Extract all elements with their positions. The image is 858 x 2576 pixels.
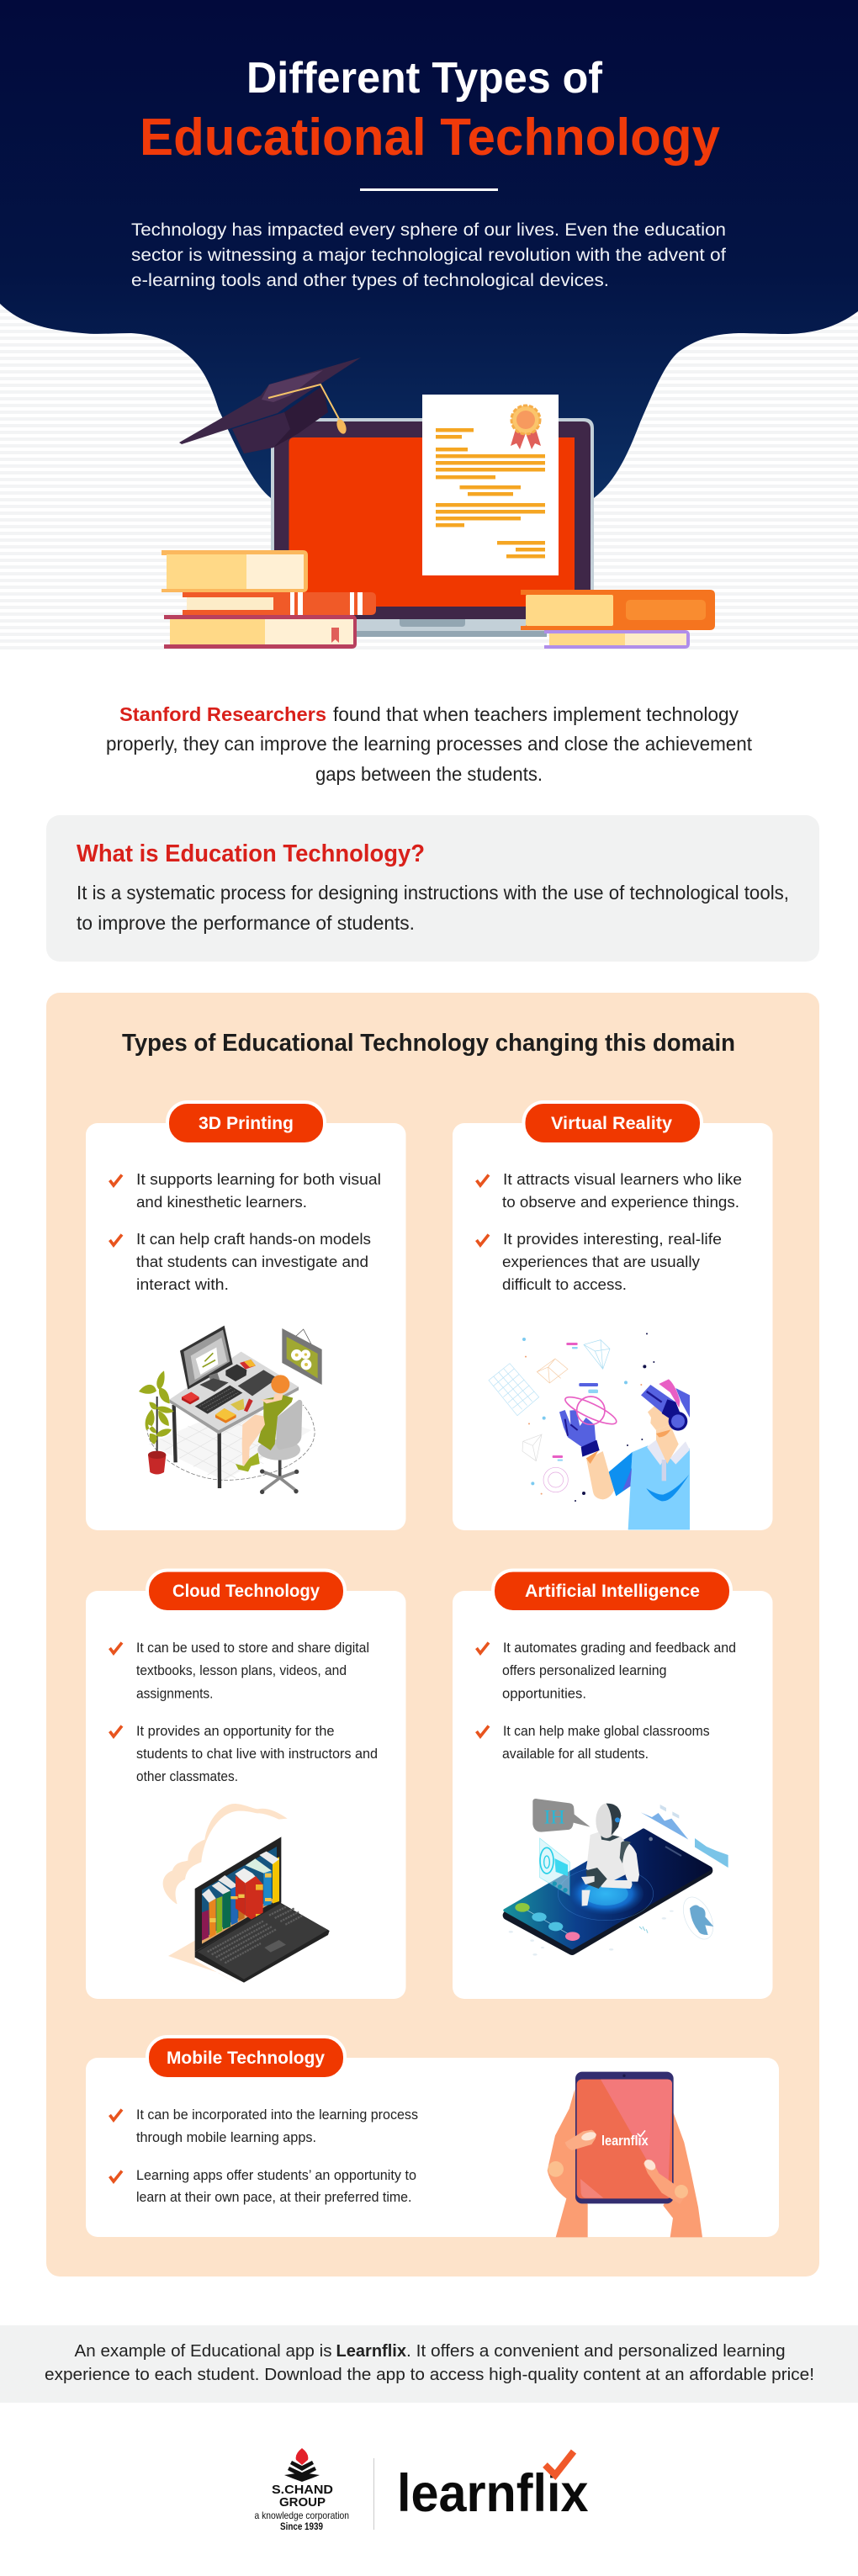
Stanford researchers statement: found that when teachers implement technology [333, 703, 739, 725]
card: mobile technology [86, 2037, 779, 2237]
illustration: laptop with books in the cloud [163, 1804, 330, 1985]
Stanford researchers statement: Stanford Researchers [119, 703, 326, 725]
left book stack [162, 550, 376, 649]
logo: learnflix: learnflix [397, 2464, 589, 2523]
shelf books [202, 1852, 279, 1941]
bullets: cloud technology: assignments. [136, 1686, 214, 1701]
card: 3D printing [86, 1102, 405, 1530]
right book stack [521, 590, 715, 649]
picture frame [282, 1328, 322, 1385]
bullets: virtual reality: difficult to access. [502, 1276, 627, 1293]
bullets: mobile technology: It can be incorporated into the learning process [136, 2107, 418, 2123]
illustration: student in VR headset [489, 1333, 690, 1529]
panel: what is education technology [46, 815, 819, 962]
robot [581, 1804, 639, 1906]
group name: S.CHAND [272, 2483, 333, 2497]
plant [139, 1370, 174, 1474]
Stanford researchers statement [106, 703, 753, 785]
bullets: artificial intelligence: It can help make global classrooms [503, 1724, 710, 1739]
Stanford researchers statement: properly, they can improve the learning processes and close the achievement [106, 733, 753, 755]
bullets: virtual reality: It provides interesting, real-life [503, 1231, 722, 1248]
group name: Since 1939 [280, 2520, 323, 2532]
card: cloud technology [86, 1570, 405, 1999]
definition text: to improve the performance of students. [77, 912, 415, 934]
definition heading: What is Education Technology? [77, 840, 425, 867]
group name: GROUP [279, 2495, 326, 2510]
bullets: 3D printing [109, 1171, 381, 1293]
smartphone [505, 1830, 711, 1950]
floating charts [641, 1805, 728, 1868]
bullets: 3D printing: It can help craft hands-on models [136, 1231, 371, 1248]
bullets: mobile technology: through mobile learning apps. [136, 2130, 316, 2145]
striped background behind hero [0, 299, 858, 649]
bullets: 3D printing: that students can investigate and [136, 1254, 368, 1270]
bullets: cloud technology: students to chat live with instructors and [136, 1746, 378, 1762]
bottom band: learnflix example: Learnflix [336, 2341, 407, 2361]
laptop screen [195, 1837, 281, 1952]
bullets: artificial intelligence: offers personalized learning [502, 1663, 666, 1678]
bottom band: learnflix example: An example of Educational app is [74, 2341, 332, 2361]
pill: 3D printing [167, 1102, 325, 1144]
woman [236, 1375, 293, 1471]
Stanford researchers statement: gaps between the students. [315, 763, 543, 785]
hologram panel [540, 1838, 569, 1895]
pill: virtual reality: Virtual Reality [551, 1113, 672, 1133]
illustration: hands holding learnflix tablet [548, 2072, 702, 2237]
intro paragraph [131, 220, 726, 290]
app logo: learnflix [601, 2133, 649, 2149]
intro paragraph: Technology has impacted every sphere of our lives. Even the education [131, 220, 726, 240]
definition text: It is a systematic process for designing instructions with the use of technological tools, [77, 882, 789, 904]
man [586, 1379, 690, 1529]
card: virtual reality [453, 1102, 772, 1530]
tagline: a knowledge corporation [254, 2510, 349, 2521]
laptop [271, 418, 594, 637]
bullets: artificial intelligence: available for all students. [502, 1746, 649, 1762]
bullets: virtual reality: experiences that are usually [502, 1254, 700, 1270]
bullets: mobile technology: learn at their own pace, at their preferred time. [136, 2190, 412, 2205]
pill: virtual reality [523, 1102, 702, 1144]
bullets: cloud technology: It can be used to store and share digital [136, 1640, 369, 1656]
bullets: virtual reality: It attracts visual learners who like [503, 1171, 742, 1188]
hero header shape [0, 0, 858, 498]
certificate [422, 395, 559, 575]
icon: tree emblem [284, 2448, 320, 2482]
bullets: virtual reality: to observe and experience things. [502, 1194, 739, 1211]
bullets: cloud technology: textbooks, lesson plans, videos, and [136, 1663, 347, 1678]
bottom band: learnflix example: experience to each student. Download the app to access high-quality content at an affordable price! [45, 2365, 814, 2384]
pill: mobile technology: Mobile Technology [167, 2048, 325, 2068]
speech bubble: IH [544, 1806, 565, 1828]
logo: S. Chand Group [254, 2448, 349, 2532]
intro paragraph: sector is witnessing a major technological revolution with the advent of [131, 246, 726, 265]
wireframe shapes [489, 1340, 610, 1492]
illustration: robot on smartphone [505, 1799, 728, 1956]
graduation cap [179, 358, 361, 453]
bullets: cloud technology [109, 1640, 378, 1784]
bullets: 3D printing: and kinesthetic learners. [136, 1194, 307, 1211]
bullets: cloud technology: other classmates. [136, 1769, 238, 1784]
definition text [77, 882, 789, 934]
types heading: Types of Educational Technology changing this domain [122, 1030, 735, 1057]
icon: orange check [545, 2451, 574, 2475]
thumbs [548, 2130, 688, 2204]
bullets: cloud technology: It provides an opportunity for the [136, 1724, 335, 1739]
bars and dots [522, 1333, 654, 1502]
chair [257, 1400, 302, 1494]
pill: artificial intelligence: Artificial Intelligence [525, 1581, 700, 1601]
pill: mobile technology [147, 2037, 345, 2079]
bullets: 3D printing: It supports learning for both visual [136, 1171, 381, 1188]
group name [272, 2483, 333, 2532]
bullets: mobile technology [109, 2107, 418, 2205]
bullets: artificial intelligence: opportunities. [502, 1686, 586, 1701]
hands behind [548, 2089, 702, 2237]
floating molecule [677, 1892, 719, 1944]
panel: types of educational technology [46, 993, 819, 2277]
tablet [575, 2072, 674, 2203]
intro paragraph: e-learning tools and other types of technological devices. [131, 271, 609, 290]
speech bubble [532, 1799, 591, 1832]
bottom band: learnflix example [0, 2325, 858, 2403]
planet and glove [559, 1392, 619, 1464]
bullets: 3D printing: interact with. [136, 1276, 229, 1293]
pill: artificial intelligence [493, 1570, 731, 1612]
bottom band: learnflix example: . It offers a convenient and personalized learning [406, 2341, 786, 2361]
illustration: isometric designer desk [139, 1326, 322, 1494]
title [140, 54, 720, 167]
pill: 3D printing: 3D Printing [199, 1113, 294, 1133]
laptop deck [195, 1903, 330, 1983]
bullets: mobile technology: Learning apps offer students’ an opportunity to [136, 2168, 416, 2183]
pill: cloud technology [147, 1570, 345, 1612]
title: Educational Technology [140, 109, 720, 167]
title: Different Types of [246, 54, 603, 103]
bullets: artificial intelligence [476, 1640, 736, 1762]
bullets: artificial intelligence: It automates grading and feedback and [503, 1640, 736, 1656]
pill: cloud technology: Cloud Technology [172, 1581, 320, 1601]
card: artificial intelligence [453, 1570, 772, 1999]
bullets: virtual reality [476, 1171, 742, 1293]
hero illustration: laptop, certificate, cap and books [162, 358, 715, 649]
